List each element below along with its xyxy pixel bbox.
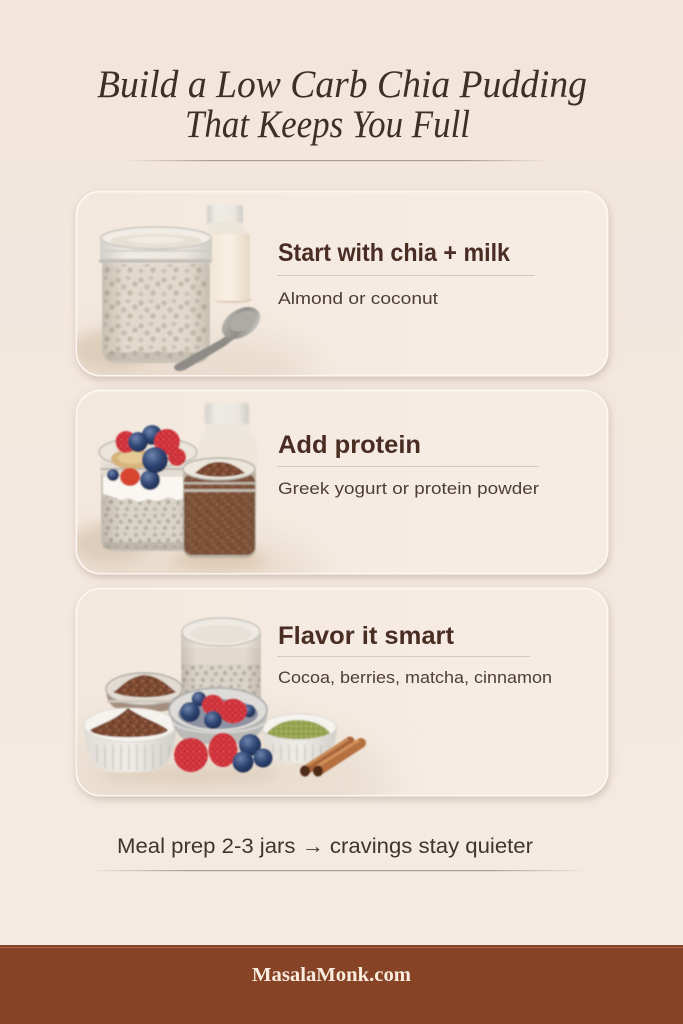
illustration: spoon: [174, 300, 266, 371]
title: [97, 63, 587, 146]
illustration: chia pudding jar: [99, 227, 212, 363]
heading: flavor it smart: Flavor it smart: [278, 622, 455, 650]
meal prep tip: Meal prep 2-3 jars → cravings stay quieter: [117, 835, 533, 858]
footer band: [0, 945, 683, 1024]
illustration: berry glass bowl: [169, 688, 267, 744]
title: That Keeps You Full: [185, 103, 470, 146]
text: almond or coconut: Almond or coconut: [278, 289, 438, 308]
illustration: chia jar: [181, 618, 261, 704]
illustration: matcha ramekin: [262, 714, 337, 763]
title: Build a Low Carb Chia Pudding: [97, 63, 587, 106]
heading: start with chia + milk: Start with chia + milk: [278, 239, 510, 267]
panel: start with chia + milk: [73, 190, 613, 383]
heading: add protein: Add protein: [278, 431, 421, 459]
text: greek yogurt or protein powder: Greek yogurt or protein powder: [278, 479, 539, 498]
illustration: milk bottle: [199, 403, 257, 508]
illustration: protein powder jar: [183, 458, 256, 558]
illustration: cinnamon sticks: [300, 739, 361, 776]
panel: add protein: [73, 389, 613, 581]
footer text: website: MasalaMonk.com: [252, 964, 411, 986]
illustration: cocoa ramekin: [84, 708, 176, 772]
illustration: yogurt berry jar: [99, 425, 198, 551]
illustration: cocoa glass bowl: [106, 673, 182, 712]
illustration: milk bottle: [207, 205, 252, 303]
text: cocoa, berries, matcha, cinnamon: Cocoa, berries, matcha, cinnamon: [278, 668, 552, 687]
panel: flavor it smart: [73, 587, 613, 803]
illustration: loose berries: [174, 733, 272, 772]
